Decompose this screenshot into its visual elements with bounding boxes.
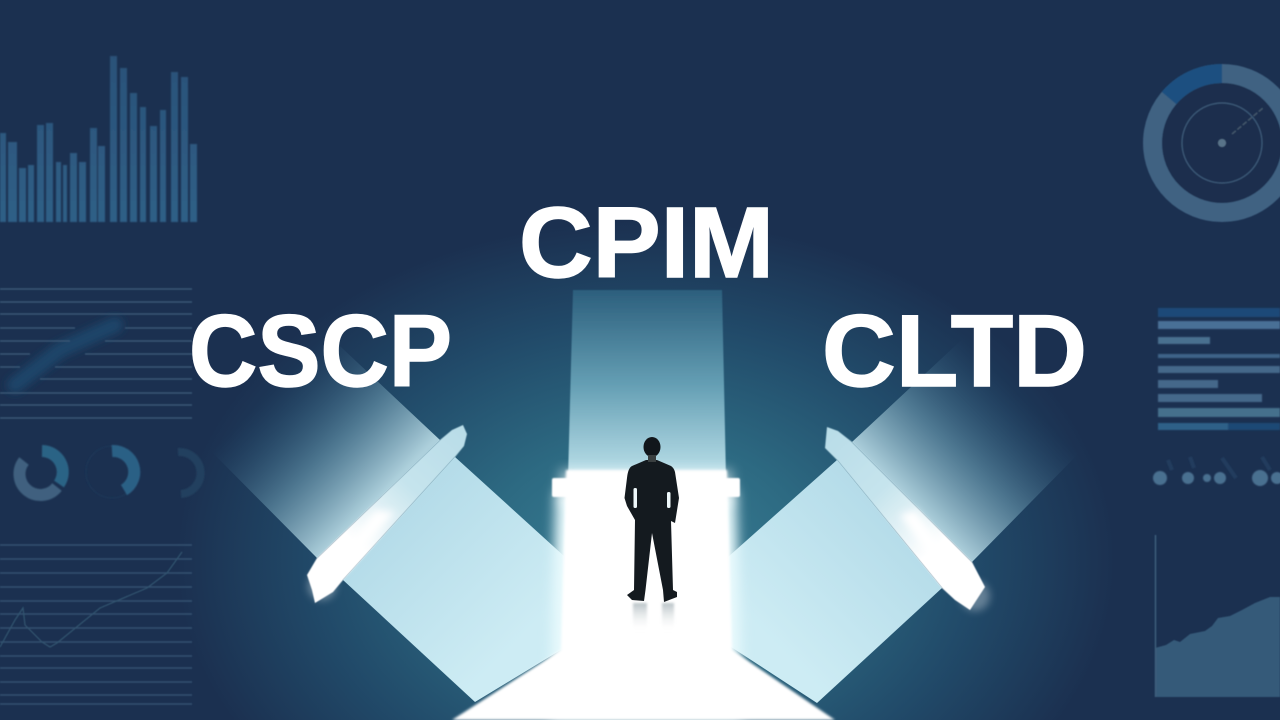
donut charts	[19, 446, 201, 498]
left lined chart	[0, 289, 192, 418]
right horizontal bars	[1158, 308, 1280, 430]
label: CPIM: CPIM	[519, 187, 774, 299]
head	[644, 437, 660, 457]
right area chart	[1155, 535, 1280, 697]
right upper beam	[852, 332, 1085, 562]
figure: man seen from behind	[624, 437, 679, 631]
right dot row	[1153, 457, 1280, 486]
central upper beam	[568, 290, 726, 478]
central light bar	[552, 470, 740, 504]
label: CSCP: CSCP	[189, 294, 452, 408]
right light bar	[825, 427, 990, 611]
floor reflection	[633, 603, 674, 631]
body silhouette	[624, 460, 679, 602]
left line chart	[0, 545, 192, 704]
right lit panel	[728, 460, 942, 703]
left bar chart	[0, 56, 197, 222]
neck	[648, 455, 656, 462]
left upper beam	[205, 332, 440, 558]
central floor glow	[550, 490, 742, 720]
left lit panel	[343, 457, 564, 702]
central lit floor	[452, 470, 835, 720]
radial gauge	[1152, 73, 1280, 212]
label: CLTD: CLTD	[822, 294, 1087, 408]
arm gaps	[634, 488, 670, 508]
left light bar	[307, 425, 467, 603]
